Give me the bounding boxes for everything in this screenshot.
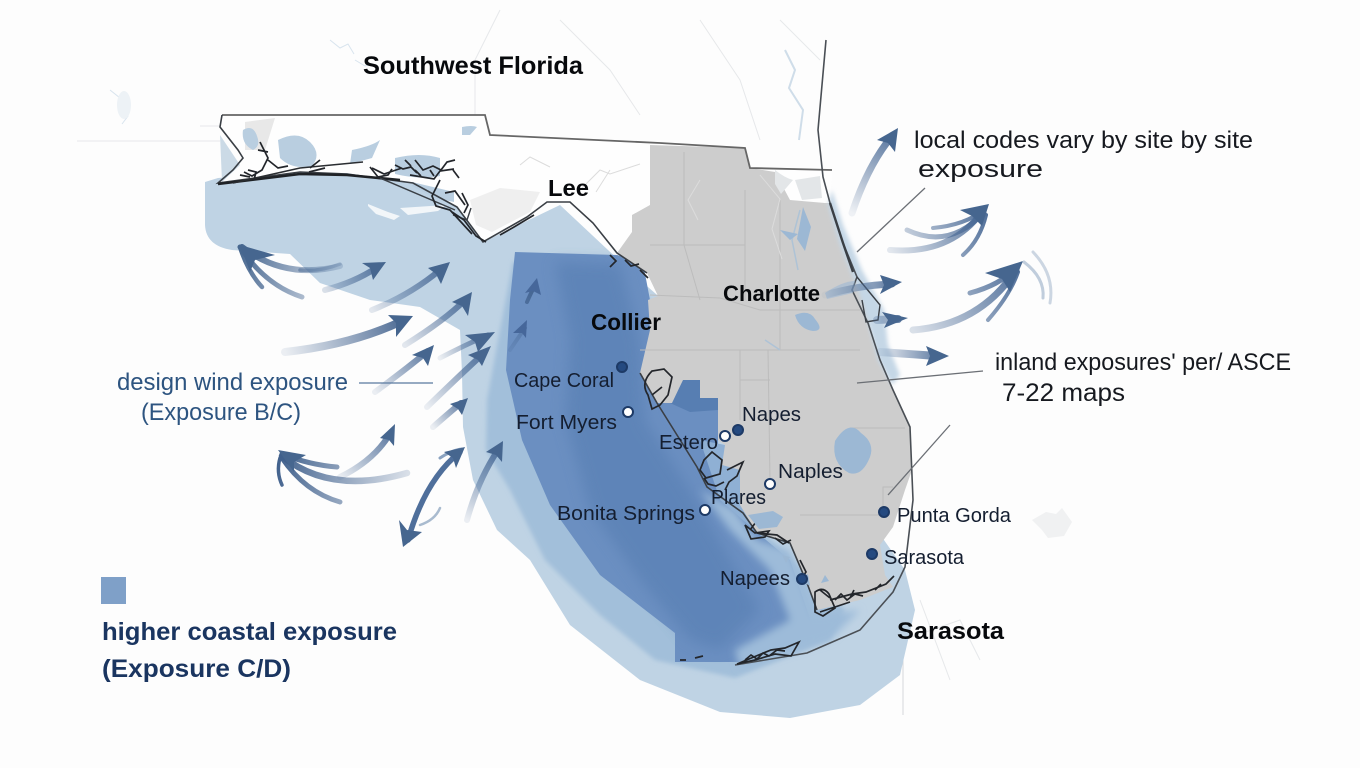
county and city labels: Estero xyxy=(659,432,718,454)
arrow xyxy=(340,424,395,477)
legend text: higher coastal exposure xyxy=(102,618,397,646)
county and city labels: Collier xyxy=(591,309,661,335)
map: atlantic coastal glow xyxy=(828,190,900,385)
double-headed arrow xyxy=(399,447,465,547)
map: barrier islands and inlets xyxy=(240,142,894,664)
arrow xyxy=(372,262,450,310)
county and city labels: Punta Gorda xyxy=(897,505,1012,527)
map: higher exposure zone (dark blue) xyxy=(506,252,812,662)
map: darker offshore block xyxy=(670,380,718,412)
callout: local codes xyxy=(914,127,1253,183)
arrow xyxy=(285,315,413,352)
callout: inland exposures: inland exposures' per/ ASCE xyxy=(995,349,1291,376)
county and city labels: Charlotte xyxy=(723,281,820,306)
county and city labels: Sarasota xyxy=(897,618,1005,645)
arrow fan xyxy=(913,252,1051,330)
legend text xyxy=(102,618,397,683)
map: panhandle inland shading xyxy=(220,118,822,232)
arrow xyxy=(877,312,908,328)
county and city labels: Sarasota xyxy=(884,547,965,569)
arrow xyxy=(525,278,541,302)
county and city labels: Napes xyxy=(742,404,801,426)
arrow xyxy=(405,292,472,345)
arrow xyxy=(427,346,491,407)
callout: inland exposures: 7-22 maps xyxy=(1002,379,1125,407)
map: outer exposure zone (light blue) xyxy=(205,172,915,718)
map: mid exposure band xyxy=(486,260,845,678)
map: peninsula grey land xyxy=(617,145,912,610)
map: gulf barrier strips xyxy=(368,204,446,220)
county and city labels: Fort Myers xyxy=(516,412,617,434)
city markers xyxy=(617,362,889,584)
map: lakes xyxy=(748,207,871,586)
arrow xyxy=(375,345,434,392)
map: lighter shelf along the southwest coast xyxy=(700,490,860,668)
leader lines xyxy=(359,188,983,495)
arrow xyxy=(825,275,902,295)
arrow xyxy=(852,128,898,213)
faint background map: neighbouring states xyxy=(77,10,1072,715)
legend swatch xyxy=(101,577,126,604)
arrow xyxy=(467,441,503,520)
callout: local codes: local codes vary by site by site xyxy=(914,127,1253,154)
callout: design wind exposure: design wind exposure xyxy=(117,369,348,396)
county and city labels: Naples xyxy=(778,461,843,483)
map: coastal patches beside estero xyxy=(700,440,760,535)
county and city labels: Plares xyxy=(711,487,766,509)
wind arrows: atlantic side xyxy=(825,128,1051,366)
arrow xyxy=(325,262,386,290)
arrow xyxy=(440,332,495,358)
county and city labels: Bonita Springs xyxy=(557,503,695,525)
map: Florida panhandle land xyxy=(218,115,832,253)
map: interior county lines and rivers xyxy=(520,152,905,515)
county and city labels: Lee xyxy=(548,175,589,201)
arrow fan xyxy=(890,204,989,255)
arrow fan: lower left xyxy=(278,450,407,502)
county and city labels: Napees xyxy=(720,568,790,590)
callout: design wind exposure xyxy=(117,369,348,426)
arrow xyxy=(433,398,468,427)
arrow fan: top left xyxy=(240,245,340,297)
title: Southwest Florida xyxy=(363,52,584,80)
wind arrows: gulf side xyxy=(240,245,541,547)
arrow xyxy=(510,320,527,350)
map: dark blue inner shading xyxy=(555,262,760,650)
map: coastline outlines xyxy=(218,40,913,665)
county and city labels xyxy=(514,175,1012,645)
county and city labels: Cape Coral xyxy=(514,370,614,392)
callout: local codes: exposure xyxy=(918,156,1043,183)
legend text: (Exposure C/D) xyxy=(102,655,291,683)
arrow xyxy=(880,346,949,366)
callout: inland exposures xyxy=(995,349,1291,407)
callout: design wind exposure: (Exposure B/C) xyxy=(141,399,301,426)
